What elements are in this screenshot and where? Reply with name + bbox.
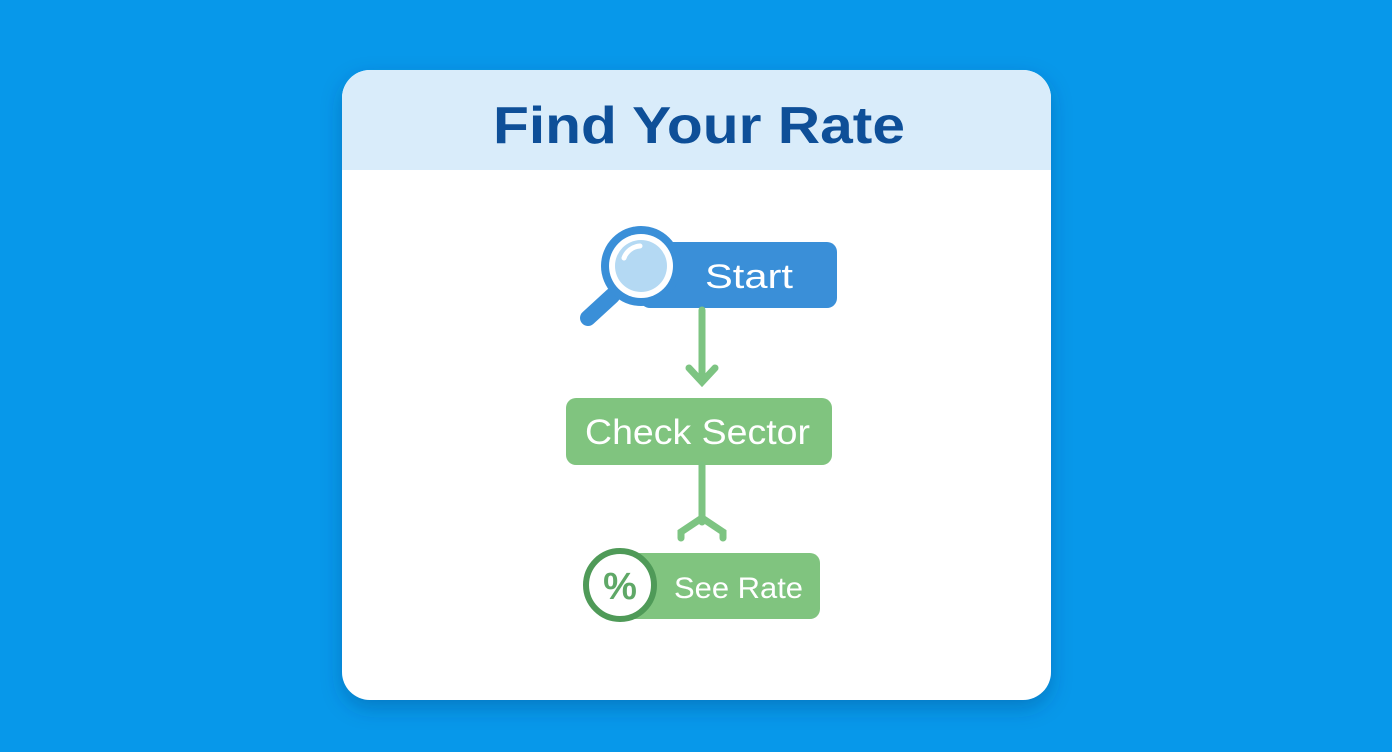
icon: percent xyxy=(586,551,654,619)
title: Find Your Rate xyxy=(493,97,905,155)
card panel xyxy=(342,70,1051,700)
step: start xyxy=(588,226,837,318)
step: see rate: See Rate xyxy=(674,572,803,605)
step: start: Start xyxy=(705,258,794,296)
step: check sector: Check Sector xyxy=(585,413,810,452)
arrow: check sector to see rate xyxy=(681,465,723,538)
icon: magnifier xyxy=(588,226,681,318)
step: check sector xyxy=(566,398,832,465)
icon: percent: % xyxy=(603,566,637,608)
arrow: start to check sector xyxy=(689,310,715,382)
step: see rate xyxy=(586,551,820,619)
